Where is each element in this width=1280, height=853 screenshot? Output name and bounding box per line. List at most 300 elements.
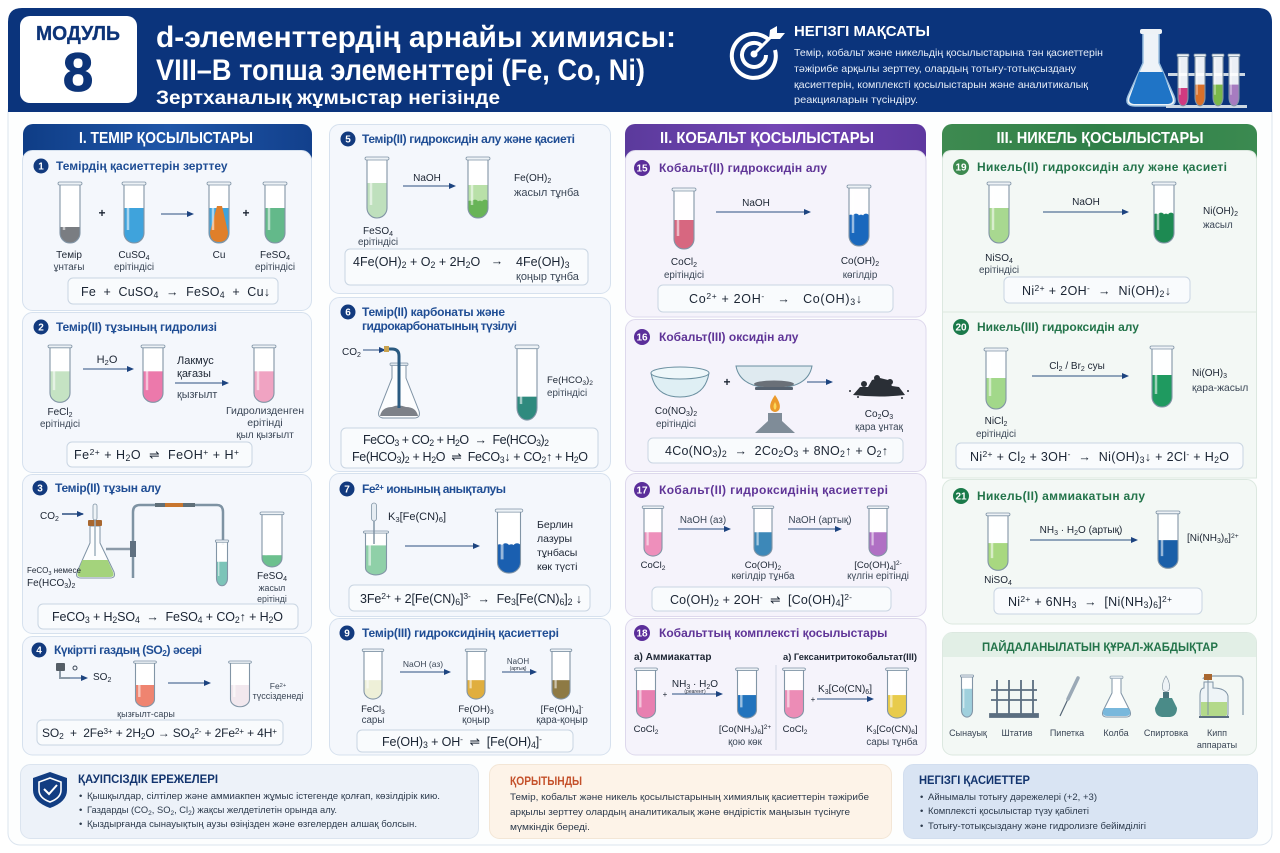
apparatus: flask with rocks bbox=[379, 346, 419, 418]
labels: CoCl2 bbox=[671, 257, 697, 269]
label Fe2+: түссізденеді bbox=[253, 691, 303, 701]
column header: cobalt bbox=[625, 124, 926, 166]
arrow bbox=[168, 682, 210, 684]
equation 17 bbox=[652, 587, 891, 611]
panel 7: Fe2+ detection bbox=[330, 474, 610, 616]
number badge 19: 19 bbox=[955, 162, 967, 174]
tube: FeSO4 bbox=[263, 182, 287, 248]
heading 7: Fe2+ ионының анықталуы bbox=[362, 482, 506, 496]
labels: CoCl2 bbox=[783, 724, 808, 736]
labels: сары тұнба bbox=[866, 737, 918, 748]
goal text bbox=[794, 23, 1103, 106]
panel 6: iron(II) carbonate bbox=[330, 298, 610, 472]
labels: CuSO4 bbox=[118, 250, 150, 262]
tube: Fe(OH)2 bbox=[466, 157, 490, 225]
number badge 18 bbox=[634, 625, 650, 641]
arrow: Cl2 / Br2 суы bbox=[1049, 361, 1105, 373]
tube: CoCl2 right bbox=[783, 668, 805, 723]
arrow: NaOH (артық) bbox=[789, 515, 851, 526]
labels: [Fe(OH)4]- bbox=[541, 704, 583, 716]
equipment labels: Пипетка bbox=[1050, 728, 1084, 738]
labels bbox=[984, 533, 1239, 587]
number badge 21 bbox=[953, 488, 969, 504]
safety text: • bbox=[79, 791, 82, 802]
panel 20: nickel(III) hydroxide bbox=[942, 312, 1256, 478]
tube: [Co(OH)4]2- bbox=[867, 506, 889, 565]
title bbox=[156, 21, 676, 109]
icon: gas valve with SO2: SO2 bbox=[93, 672, 111, 684]
arrow NaOH: NaOH bbox=[742, 198, 770, 209]
key properties panel: НЕГІЗГІ ҚАСИЕТТЕР bbox=[919, 773, 1030, 787]
equation 5 bbox=[345, 249, 588, 285]
goal text: реакцияларын түсіндіру. bbox=[794, 94, 918, 106]
safety text: • bbox=[79, 805, 82, 816]
arrow K3: + bbox=[811, 695, 816, 704]
icon: target bbox=[732, 26, 785, 78]
labels: ерітінді bbox=[257, 594, 287, 604]
arrow bbox=[161, 213, 193, 215]
column header: iron: I. ТЕМІР ҚОСЫЛЫСТАРЫ bbox=[79, 130, 253, 147]
equation 3: FeCO3 + H2SO4 → FeSO4 + CO2↑ + H2O bbox=[52, 610, 283, 625]
number badge 18: 18 bbox=[636, 628, 648, 640]
title: VIII–B топша элементтері (Fe, Co, Ni) bbox=[156, 54, 645, 87]
title: d-элементтердің арнайы химиясы: bbox=[156, 21, 676, 54]
label Fe2+: Fe2+ bbox=[270, 681, 287, 691]
plus signs: + bbox=[242, 206, 250, 220]
number badge 5: 5 bbox=[345, 134, 351, 146]
tube: blue complex bbox=[736, 668, 758, 728]
labels: K3[Co(CN)6] bbox=[866, 724, 918, 736]
equation 7 bbox=[349, 585, 590, 611]
arrow: NH3 · H2O (артық) bbox=[1040, 525, 1122, 537]
panel 3: obtaining iron(II) salt bbox=[22, 474, 312, 634]
litmus label and arrow: қағазы bbox=[177, 368, 211, 380]
tube: iron powder bbox=[58, 182, 82, 247]
heading 1: Темірдің қасиеттерін зерттеу bbox=[56, 159, 228, 173]
equation 19 bbox=[1004, 277, 1190, 303]
goal text: қасиеттерін, комплексті қосылыстарын және аналитикалық bbox=[794, 79, 1088, 91]
labels bbox=[655, 406, 904, 433]
arrow bbox=[1030, 525, 1137, 540]
litmus label and arrow: Лакмус bbox=[177, 355, 214, 367]
panel 16: cobalt(III) oxide bbox=[626, 320, 926, 472]
labels bbox=[40, 405, 304, 441]
equation 2 bbox=[67, 442, 252, 467]
labels: Fe(OH)3 bbox=[458, 704, 494, 716]
icon: spirit lamp bbox=[1155, 676, 1177, 717]
equation 20: Ni2+ + Cl2 + 3OH- → Ni(OH)3↓ + 2Cl- + H2O bbox=[970, 449, 1229, 465]
equation 21 bbox=[994, 588, 1202, 614]
arrow: NaOH bbox=[507, 657, 529, 666]
arrow H2O bbox=[83, 368, 133, 370]
equipment labels: Кипп bbox=[1207, 728, 1227, 738]
key properties panel: Тотығу-тотықсыздану және гидролизге бейімділігі bbox=[928, 821, 1146, 832]
equation 3 bbox=[38, 604, 298, 629]
panel 5: iron(II) hydroxide bbox=[330, 124, 610, 294]
panel 18: cobalt complex compounds bbox=[626, 618, 926, 755]
equation 5: 4Fe(OH)3 bbox=[516, 255, 570, 270]
panel 1: iron properties bbox=[22, 150, 312, 310]
arrow: NaOH (аз) bbox=[403, 659, 443, 669]
equation 4 bbox=[37, 720, 283, 745]
labels: FeCO3 немесе bbox=[27, 566, 82, 577]
labels: FeSO4 bbox=[257, 571, 287, 583]
key properties panel: Комплексті қосылыстар түзу қабілеті bbox=[928, 806, 1089, 817]
labels bbox=[361, 704, 588, 726]
column header: nickel: III. НИКЕЛЬ ҚОСЫЛЫСТАРЫ bbox=[996, 130, 1204, 147]
subheadings: а) Гексанитритокобальтат(III) bbox=[783, 652, 917, 663]
labels: ерітіндісі bbox=[979, 265, 1019, 276]
labels: қара-жасыл bbox=[1192, 383, 1248, 394]
labels: NiSO4 bbox=[985, 253, 1013, 265]
arrow ammonia bbox=[663, 679, 722, 699]
labels bbox=[54, 250, 295, 273]
labels: ұнтағы bbox=[54, 262, 84, 273]
key properties panel: • bbox=[920, 821, 923, 832]
labels bbox=[979, 206, 1238, 276]
equipment labels: аппараты bbox=[1197, 740, 1237, 750]
labels: Co(OH)2 bbox=[841, 256, 879, 268]
number badge 21: 21 bbox=[955, 492, 967, 502]
heading 6: Темір(II) карбонаты және bbox=[362, 305, 505, 319]
module badge: 8 bbox=[63, 41, 93, 103]
heading 21: Никель(II) аммиакатын алу bbox=[977, 489, 1145, 503]
tube: Fe(OH)3 bbox=[465, 649, 487, 705]
labels: Ni(OH)3 bbox=[1192, 368, 1227, 380]
arrow NaOH bbox=[1043, 197, 1128, 212]
panel 21: nickel(II) ammine bbox=[942, 480, 1256, 624]
equation 21: Ni2+ + 6NH3 → [Ni(NH3)6]2+ bbox=[1008, 594, 1172, 610]
equation 9 bbox=[357, 730, 573, 752]
key properties panel bbox=[904, 764, 1258, 838]
equation 2: Fe2+ + H2O ⇌ FeOH+ + H+ bbox=[74, 447, 239, 463]
tube: Co(OH)2 bbox=[752, 506, 774, 565]
icon: shield bbox=[33, 772, 67, 808]
plus signs bbox=[98, 206, 250, 220]
labels bbox=[664, 256, 879, 281]
equipment labels: Спиртовка bbox=[1144, 728, 1188, 738]
module badge bbox=[20, 16, 137, 103]
labels: ерітінді bbox=[247, 417, 283, 429]
number badge 19 bbox=[953, 159, 969, 175]
safety text: ҚАУІПСІЗДІК ЕРЕЖЕЛЕРІ bbox=[78, 772, 218, 786]
labels: ерітіндісі bbox=[656, 419, 696, 430]
arrow bbox=[502, 657, 536, 672]
icon: evaporating bowl over burner bbox=[736, 366, 812, 433]
equation 4: SO2 + 2Fe3+ + 2H2O → SO42- + 2Fe2+ + 4H+ bbox=[42, 726, 277, 741]
label reagent: K3[Fe(CN)6] bbox=[388, 511, 446, 524]
equipment labels: Сынауық bbox=[949, 728, 987, 738]
arrow NaOH: NaOH bbox=[1072, 197, 1100, 208]
equation 6 bbox=[341, 428, 598, 468]
safety text bbox=[78, 772, 440, 830]
equipment title: ПАЙДАЛАНЫЛАТЫН ҚҰРАЛ-ЖАБДЫҚТАР bbox=[982, 639, 1218, 654]
tube: NiSO4 bbox=[987, 182, 1011, 248]
heading 15: Кобальт(II) гидроксидін алу bbox=[659, 161, 827, 175]
number badge 20 bbox=[953, 319, 969, 335]
label H2O: H2O bbox=[97, 354, 118, 367]
labels: FeSO4 bbox=[260, 250, 290, 262]
equation 6: FeCO3 + CO2 + H2O → Fe(HCO3)2 bbox=[363, 433, 549, 448]
labels: күлгін ерітінді bbox=[847, 571, 909, 582]
description: тұнбасы bbox=[537, 547, 577, 559]
arrow ammonia: (реагент) bbox=[684, 689, 706, 695]
plus: + bbox=[723, 375, 731, 389]
heading 3: Темір(II) тұзын алу bbox=[55, 481, 161, 495]
labels: CoCl2 bbox=[641, 560, 666, 572]
arrow NaOH bbox=[403, 173, 455, 186]
tube: NiCl2 bbox=[984, 348, 1008, 418]
labels: сары bbox=[362, 715, 384, 726]
labels: FeSO4 bbox=[363, 226, 393, 238]
plus signs: + bbox=[98, 206, 106, 220]
arrow: NaOH (аз) bbox=[680, 515, 726, 526]
arrow bbox=[405, 545, 479, 547]
panel: equipment bbox=[942, 632, 1256, 755]
labels: NiCl2 bbox=[985, 416, 1007, 428]
number badge 9 bbox=[340, 626, 354, 640]
icon: flask bbox=[1102, 676, 1130, 717]
tube: CoCl2 bbox=[642, 506, 664, 565]
heading 6: гидрокарбонатының түзілуі bbox=[362, 319, 517, 333]
key properties panel: Айнымалы тотығу дәрежелері (+2, +3) bbox=[928, 792, 1097, 803]
number badge 7 bbox=[340, 482, 354, 496]
icon: test tube bbox=[960, 675, 974, 723]
icon: Kipp apparatus bbox=[1199, 674, 1243, 718]
labels: ерітіндісі bbox=[40, 419, 80, 430]
number badge 16 bbox=[634, 329, 650, 345]
number badge 4: 4 bbox=[36, 646, 42, 656]
number badge 4 bbox=[32, 642, 46, 658]
labels: ерітіндісі bbox=[114, 262, 154, 273]
goal text: тәжірибе арқылы зерттеу, олардың тотығу-тотықсыздану bbox=[794, 63, 1077, 75]
equation 5: қоңыр тұнба bbox=[516, 271, 580, 283]
equation 20 bbox=[956, 443, 1243, 469]
number badge 2: 2 bbox=[38, 322, 44, 334]
arrow: (артық) bbox=[510, 666, 527, 672]
number badge 6 bbox=[340, 304, 356, 320]
tube: CoCl2 bbox=[672, 188, 696, 250]
labels: көгілдір bbox=[843, 270, 878, 281]
tube: yellow bbox=[886, 668, 908, 728]
arrow bbox=[678, 515, 730, 529]
panel 19: nickel(II) hydroxide bbox=[942, 150, 1256, 312]
icon: pipette bbox=[1060, 678, 1078, 716]
number badge 1 bbox=[34, 158, 48, 174]
arrow K3: K3[Co(CN)6] bbox=[818, 684, 872, 696]
header banner bbox=[8, 8, 1272, 114]
tube: with dropper bbox=[363, 503, 389, 581]
tube: FeCl2 bbox=[48, 345, 72, 409]
labels: Гидролизденген bbox=[226, 405, 304, 417]
labels: [Co(OH)4]2- bbox=[854, 560, 902, 572]
equation 19: Ni2+ + 2OH- → Ni(OH)2↓ bbox=[1022, 283, 1171, 299]
number badge 6: 6 bbox=[345, 308, 351, 318]
labels bbox=[547, 375, 593, 399]
number badge 2 bbox=[34, 320, 48, 334]
tube: Co(OH)2 bbox=[847, 185, 871, 249]
tube: colourless bbox=[229, 661, 251, 715]
tube: Ni(OH)2 bbox=[1152, 182, 1176, 248]
labels: [Co(NH3)6]2+ bbox=[719, 724, 771, 736]
number badge 9: 9 bbox=[344, 628, 350, 640]
number badge 5 bbox=[340, 132, 356, 146]
tube: NiSO4 bbox=[986, 513, 1010, 581]
labels: Fe(HCO3)2 bbox=[27, 578, 75, 590]
labels bbox=[641, 560, 909, 582]
labels: Co2O3 bbox=[865, 409, 893, 421]
equation 1: Fe + CuSO4 → FeSO4 + Cu↓ bbox=[81, 285, 270, 300]
labels: жасыл bbox=[1203, 220, 1233, 231]
heading 19: Никель(II) гидроксидін алу және қасиеті bbox=[977, 160, 1227, 174]
equation 16 bbox=[648, 438, 903, 463]
tube: hydrolysed bbox=[252, 345, 276, 409]
tube: CoCl2 left bbox=[635, 668, 657, 723]
tube: orange-red bbox=[134, 661, 156, 715]
label CO2 with arrow bbox=[40, 511, 83, 523]
labels: жасыл bbox=[259, 583, 285, 593]
label CO2 with arrow: CO2 bbox=[342, 347, 361, 359]
panel 4: SO2 action bbox=[22, 636, 312, 755]
arrow ammonia: + bbox=[663, 690, 668, 699]
labels: жасыл тұнба bbox=[514, 187, 580, 199]
label Fe2+ bbox=[253, 681, 303, 701]
tube: Ni(OH)3 bbox=[1150, 346, 1174, 415]
description bbox=[537, 519, 577, 573]
heading 17: Кобальт(II) гидроксидінің қасиеттері bbox=[659, 483, 888, 497]
arrow NaOH bbox=[716, 198, 810, 212]
panel 15: cobalt(II) hydroxide bbox=[626, 150, 926, 317]
goal text: НЕГІЗГІ МАҚСАТЫ bbox=[794, 23, 930, 40]
tube: Fe(HCO3)2 bbox=[514, 344, 540, 421]
labels: NiSO4 bbox=[984, 575, 1012, 587]
heading 18: Кобальттың комплексті қосылыстары bbox=[659, 626, 887, 640]
equation 16: 4Co(NO3)2 → 2Co2O3 + 8NO2↑ + O2↑ bbox=[665, 444, 888, 459]
subheadings bbox=[634, 652, 917, 663]
safety text: Қышқылдар, сілтілер және аммиакпен жұмыс істегенде қолғап, көзілдірік кию. bbox=[87, 791, 440, 802]
heading 2: Темір(II) тұзының гидролизі bbox=[56, 320, 217, 334]
tube: CuSO4 bbox=[122, 182, 146, 248]
safety text: • bbox=[79, 819, 82, 830]
tube: FeSO4 bbox=[365, 157, 389, 223]
labels: CoCl2 bbox=[634, 724, 659, 736]
tube: Prussian blue bbox=[495, 509, 523, 575]
labels: ерітіндісі bbox=[664, 270, 704, 281]
labels: ерітіндісі bbox=[976, 429, 1016, 440]
icon: black powder bbox=[849, 375, 909, 399]
conclusion panel bbox=[490, 764, 892, 838]
tube: [Fe(OH)4]- bbox=[550, 649, 572, 705]
labels: Fe(OH)2 bbox=[514, 173, 551, 185]
labels: қоңыр bbox=[462, 715, 490, 726]
number badge 17 bbox=[634, 482, 650, 498]
label CO2 with arrow: CO2 bbox=[40, 511, 59, 523]
equation 1 bbox=[68, 278, 278, 304]
labels: FeCl3 bbox=[361, 704, 385, 716]
number badge 3: 3 bbox=[37, 484, 43, 494]
icon: dish bbox=[651, 367, 709, 397]
column header: iron bbox=[23, 124, 312, 166]
heading 20: Никель(III) гидроксидін алу bbox=[977, 320, 1139, 334]
equation 9: Fe(OH)3 + OH- ⇌ [Fe(OH)4]- bbox=[382, 734, 542, 750]
labels: Co(NO3)2 bbox=[655, 406, 697, 418]
equation 5: 4Fe(OH)2 + O2 + 2H2O bbox=[353, 255, 480, 270]
goal text: Темір, кобальт және никельдің қосылыстарына тән қасиеттерін bbox=[794, 47, 1103, 59]
arrow bbox=[400, 659, 450, 672]
label: қызғылт-сары bbox=[117, 709, 175, 719]
title: Зертханалық жұмыстар негізінде bbox=[156, 88, 500, 109]
labels bbox=[634, 724, 918, 748]
labels: ерітіндісі bbox=[547, 388, 587, 399]
arrow ammonia: NH3 · H2O bbox=[672, 679, 718, 691]
arrow bbox=[1032, 361, 1128, 376]
labels: Ni(OH)2 bbox=[1203, 206, 1238, 218]
description: лазуры bbox=[537, 533, 572, 545]
labels: ерітіндісі bbox=[358, 237, 398, 248]
icon: flask and test tube rack bbox=[1127, 29, 1247, 114]
labels: Cu bbox=[213, 250, 225, 261]
labels: қыл қызғылт bbox=[236, 430, 294, 441]
number badge 17: 17 bbox=[636, 486, 648, 496]
description: Берлин bbox=[537, 519, 573, 531]
equipment labels: Колба bbox=[1103, 728, 1129, 738]
number badge 15 bbox=[634, 160, 650, 176]
tube: pink bbox=[141, 345, 165, 409]
safety text: Қыздырғанда сынауықтың аузы өзіңізден және өзгелерден алшақ болсын. bbox=[87, 819, 417, 830]
equation 15 bbox=[658, 285, 893, 312]
number badge 3 bbox=[32, 480, 48, 496]
labels: [Ni(NH3)6]2+ bbox=[1187, 533, 1239, 545]
equation 17: Co(OH)2 + 2OH- ⇌ [Co(OH)4]2- bbox=[670, 592, 852, 608]
apparatus: flask with tubing bbox=[76, 503, 229, 592]
labels: қою көк bbox=[728, 737, 763, 748]
conclusion panel: мүмкіндік береді. bbox=[510, 822, 590, 833]
labels bbox=[27, 566, 287, 604]
panel 9: iron(III) hydroxide bbox=[330, 618, 610, 755]
column header: nickel bbox=[942, 124, 1257, 166]
panel 17: cobalt(II) hydroxide properties bbox=[626, 474, 926, 616]
tube: blue complex bbox=[1156, 511, 1180, 578]
heading 4: Күкіртті газдың (SO2) әсері bbox=[54, 643, 202, 658]
litmus label and arrow bbox=[175, 355, 228, 401]
labels: қара ұнтақ bbox=[855, 422, 904, 433]
labels: ерітіндісі bbox=[255, 262, 295, 273]
heading 9: Темір(III) гидроксидінің қасиеттері bbox=[362, 626, 559, 640]
labels: Fe(HCO3)2 bbox=[547, 375, 593, 387]
equation 7: 3Fe2+ + 2[Fe(CN)6]3- → Fe3[Fe(CN)6]2 ↓ bbox=[360, 591, 582, 607]
labels: қара-қоңыр bbox=[536, 715, 588, 726]
safety text: Газдарды (CO2, SO2, Cl2) жақсы желдетілетін орында алу. bbox=[87, 805, 337, 817]
heading 16: Кобальт(III) оксидін алу bbox=[659, 330, 799, 344]
label CO2 with arrow bbox=[342, 347, 385, 359]
tube: FeSO4 bbox=[260, 512, 284, 573]
tube: FeCl3 bbox=[362, 649, 384, 705]
icon: stand bbox=[990, 680, 1038, 717]
module badge: МОДУЛЬ bbox=[36, 23, 120, 45]
equation 15: Co2+ + 2OH- → Co(OH)3↓ bbox=[689, 291, 862, 307]
equation 5: → bbox=[491, 254, 503, 268]
arrow K3 bbox=[811, 684, 873, 704]
key properties panel: • bbox=[920, 806, 923, 817]
arrow bbox=[807, 381, 832, 383]
conclusion panel: арқылы зерттеу олардың аналитикалық және өндірістік маңызын түсінуге bbox=[510, 807, 850, 818]
labels: көгілдір тұнба bbox=[732, 571, 795, 582]
labels bbox=[976, 368, 1248, 440]
conclusion panel: ҚОРЫТЫНДЫ bbox=[510, 774, 582, 788]
heading 5: Темір(II) гидроксидін алу және қасиеті bbox=[362, 132, 575, 146]
number badge 1: 1 bbox=[38, 162, 44, 172]
conclusion panel: Темір, кобальт және никель қосылыстарының химиялық қасиеттерін тәжірибе bbox=[510, 792, 869, 803]
